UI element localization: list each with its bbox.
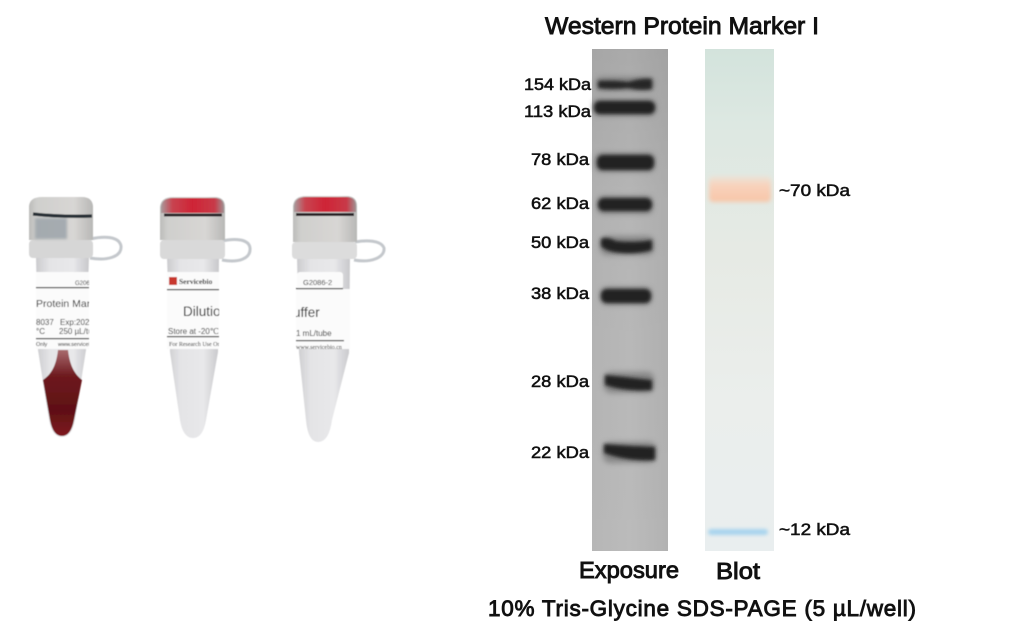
tube 1 cap (29, 197, 93, 240)
tube 1 label (35, 272, 90, 350)
tube 2 label (166, 272, 220, 350)
tube 2: dilution buffer (160, 196, 252, 438)
tube 2 label: For Research Use Only (169, 342, 225, 348)
tube 2 ring (160, 240, 225, 259)
panel: exposure gel lane (592, 49, 668, 551)
tube 2 label: Store at -20℃ (168, 327, 219, 336)
tube 3 label: G2086-2 (303, 278, 332, 287)
band halos (593, 77, 656, 463)
tube 3 label (295, 272, 350, 350)
label 28 kDa: 28 kDa (531, 372, 590, 391)
tube 1 label: www.servicebio (57, 342, 96, 348)
tube 1 body (36, 256, 89, 437)
tube 2 body (167, 256, 219, 438)
tube 1 label: Protein Marker (36, 298, 105, 310)
band 78 kDa (597, 155, 654, 170)
label ~70 kDa: ~70 kDa (779, 181, 851, 200)
orange band ~70 kDa (709, 176, 771, 202)
tube 3 hinge loop (354, 241, 384, 261)
blue band ~12 kDa (708, 529, 768, 535)
tube 3 ring (292, 242, 357, 259)
tube 3 label: Buffer (284, 305, 320, 320)
lane heading: Blot: Blot (716, 558, 761, 584)
tube 2 cap (160, 197, 225, 240)
label 78 kDa: 78 kDa (531, 150, 590, 169)
tube 3 label: 1 mL/tube (296, 329, 332, 338)
gel background (592, 49, 668, 551)
lane heading: Exposure: Exposure (579, 557, 679, 583)
label 154 kDa: 154 kDa (524, 75, 592, 94)
label 62 kDa: 62 kDa (531, 194, 590, 213)
band 50 kDa (601, 238, 652, 253)
tube 3 label: www.servicebio.cn (296, 345, 342, 351)
tube 1 label: 250 µL/tube (59, 327, 102, 336)
band 22 kDa (604, 444, 655, 460)
tube 1 label: 8037 (36, 318, 54, 327)
band 38 kDa (601, 289, 651, 303)
tube 1 label: Only (36, 342, 48, 348)
tube 1 hinge loop (90, 237, 121, 259)
band 62 kDa (598, 198, 652, 211)
title: Western Protein Marker I (545, 13, 819, 40)
tube 1: protein marker with red liquid (29, 197, 121, 437)
band 154 kDa (598, 79, 652, 90)
blot background (705, 49, 774, 551)
label 38 kDa: 38 kDa (531, 284, 590, 303)
tube 3: buffer (284, 196, 384, 442)
label 50 kDa: 50 kDa (531, 233, 590, 252)
marker labels: exposure lane (524, 75, 592, 462)
tube 3 body (297, 256, 350, 442)
tube 1 label: Exp:2022 (60, 318, 94, 327)
tube 1 label: G206 (75, 281, 90, 287)
tube 2 label: Dilution Buffer (183, 304, 268, 319)
tube 1 red liquid (43, 350, 82, 436)
tube 3 cap (293, 196, 357, 242)
tube 1 ring (29, 240, 93, 258)
label 22 kDa: 22 kDa (531, 443, 590, 462)
label ~12 kDa: ~12 kDa (779, 520, 851, 539)
tube 1 label: °C (36, 327, 45, 336)
panel: blot lane (705, 49, 774, 551)
label 113 kDa: 113 kDa (524, 102, 592, 121)
tube 2 label: Servicebio (179, 277, 213, 286)
caption: 10% Tris-Glycine SDS-PAGE (5 µL/well) (488, 596, 916, 621)
band 28 kDa (605, 375, 652, 390)
band 113 kDa (594, 101, 655, 114)
tube 2 hinge loop (222, 239, 250, 261)
